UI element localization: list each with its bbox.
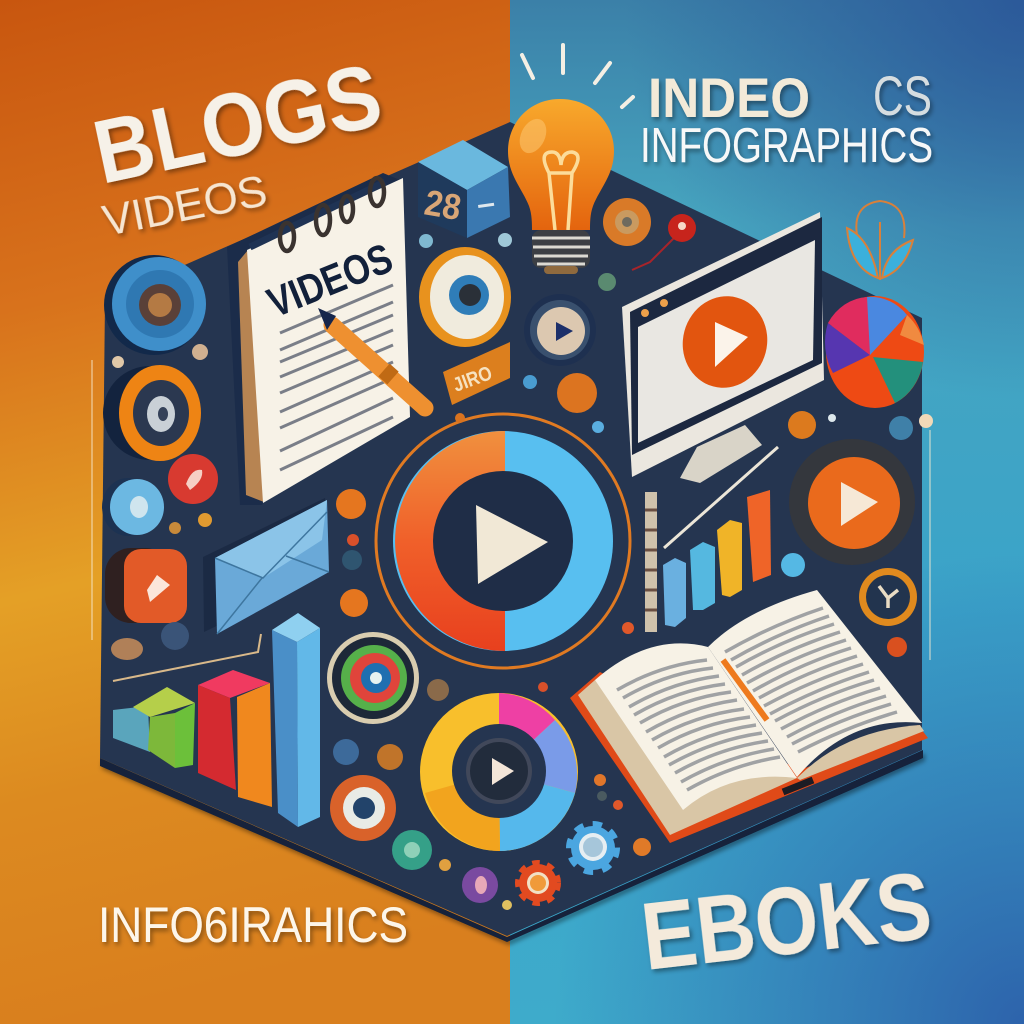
icon: envelope <box>203 498 329 634</box>
icon: orange round ball <box>557 373 597 413</box>
cube number: 28 <box>422 182 464 228</box>
icon: orange eye disc <box>330 775 396 841</box>
heading: ebooks: EBOKS <box>636 852 937 991</box>
notepad title: VIDEOS <box>261 234 399 326</box>
icon: purple disc <box>462 867 498 903</box>
icon: orange tag <box>443 342 510 405</box>
monitor stand <box>680 425 762 483</box>
notepad rings <box>280 178 384 251</box>
icon: ring eye <box>419 247 511 347</box>
icon: left blue disc <box>104 255 206 355</box>
icon: gear <box>571 826 615 870</box>
background: orange left half <box>0 0 510 1024</box>
dark isometric platform <box>100 122 923 942</box>
icon: concentric target <box>327 632 419 724</box>
icon: pen <box>318 308 425 408</box>
icon: orange play tile <box>105 548 187 623</box>
heading: indeo cs: CS <box>873 64 932 127</box>
pie chart <box>825 296 924 408</box>
icon: red pin <box>632 214 696 270</box>
open book <box>570 590 928 843</box>
icon: right play disc <box>789 439 915 565</box>
icon: red gear badge <box>519 864 557 902</box>
tag text: JIRO <box>450 362 495 397</box>
notepad text lines <box>280 285 393 470</box>
icon: small play disc <box>524 294 596 366</box>
heading: infographics bottom left: INFO6IRAHICS <box>98 897 408 953</box>
icon: left orange ring <box>103 365 201 461</box>
icon: ray lines around bulb <box>522 45 633 107</box>
heading: indeo cs <box>648 64 932 129</box>
heading: indeo cs: INDEO <box>648 66 810 129</box>
icon: leaf emblem <box>847 201 913 280</box>
icon: light bulb <box>508 99 614 274</box>
bar chart right <box>645 447 778 632</box>
icon: calendar cube <box>418 140 510 238</box>
monitor play button <box>673 287 777 397</box>
heading: videos left: VIDEOS <box>99 166 271 246</box>
icon: small red button <box>168 454 218 504</box>
notepad with videos <box>227 173 410 505</box>
icon: green disc <box>392 830 432 870</box>
main play ring <box>376 414 630 668</box>
monitor <box>622 212 824 483</box>
heading: blogs: BLOGS <box>85 45 390 204</box>
icon: target top right <box>603 198 651 246</box>
faint vertical light lines <box>92 360 930 660</box>
icon: small clock badge <box>859 568 917 626</box>
background: blue right half <box>510 0 1024 1024</box>
heading: infographics right: INFOGRAPHICS <box>640 119 933 173</box>
decorative dots <box>111 233 933 910</box>
icon: small blue button <box>102 478 164 536</box>
play triangle <box>476 505 548 584</box>
donut chart play <box>420 693 578 851</box>
bar chart left <box>113 613 320 827</box>
